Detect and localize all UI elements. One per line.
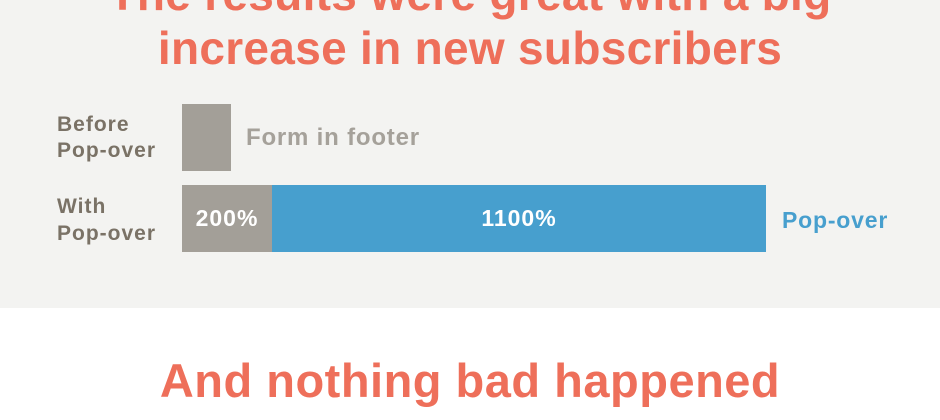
bar segment: 1100%: 1100% [481,205,557,231]
bar segment: 200%: 200% [196,205,258,231]
title [108,0,832,74]
bar: before pop-over [182,104,231,171]
label: with: With [57,195,106,218]
label: before [57,113,156,162]
bar: with pop-over [182,185,766,252]
heading: and nothing bad happened: And nothing bad happened [160,354,780,407]
label: with [57,195,156,245]
label: with: Pop-over [57,222,156,245]
bar segment: 1100% [272,185,766,252]
text: pop-over legend: Pop-over [782,207,888,233]
title: increase in new subscribers [158,22,782,74]
label: before: Before [57,113,130,136]
label: before: Pop-over [57,139,156,162]
text: form in footer: Form in footer [246,124,420,151]
bar segment: 200% [182,185,272,252]
panel: results background [0,0,940,308]
